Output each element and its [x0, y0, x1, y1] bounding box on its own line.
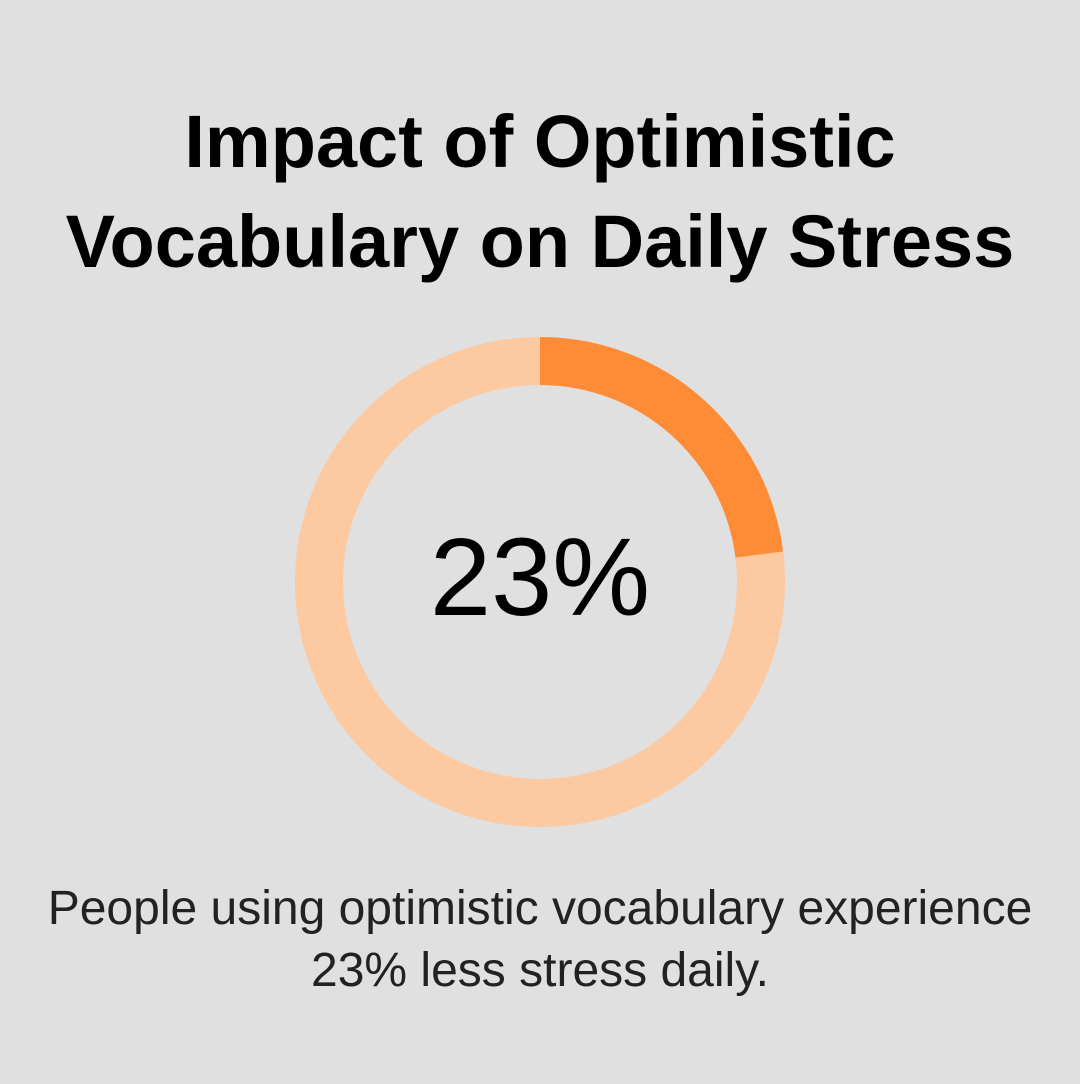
title: Vocabulary on Daily Stress [66, 200, 1014, 283]
donut arc: 23% [540, 337, 783, 558]
title [66, 100, 1014, 283]
caption: 23% less stress daily. [311, 944, 769, 997]
title: Impact of Optimistic [184, 100, 896, 183]
caption [48, 882, 1032, 997]
center value: 23% [430, 516, 650, 639]
caption: People using optimistic vocabulary experience [48, 882, 1032, 935]
donut track [319, 361, 761, 803]
